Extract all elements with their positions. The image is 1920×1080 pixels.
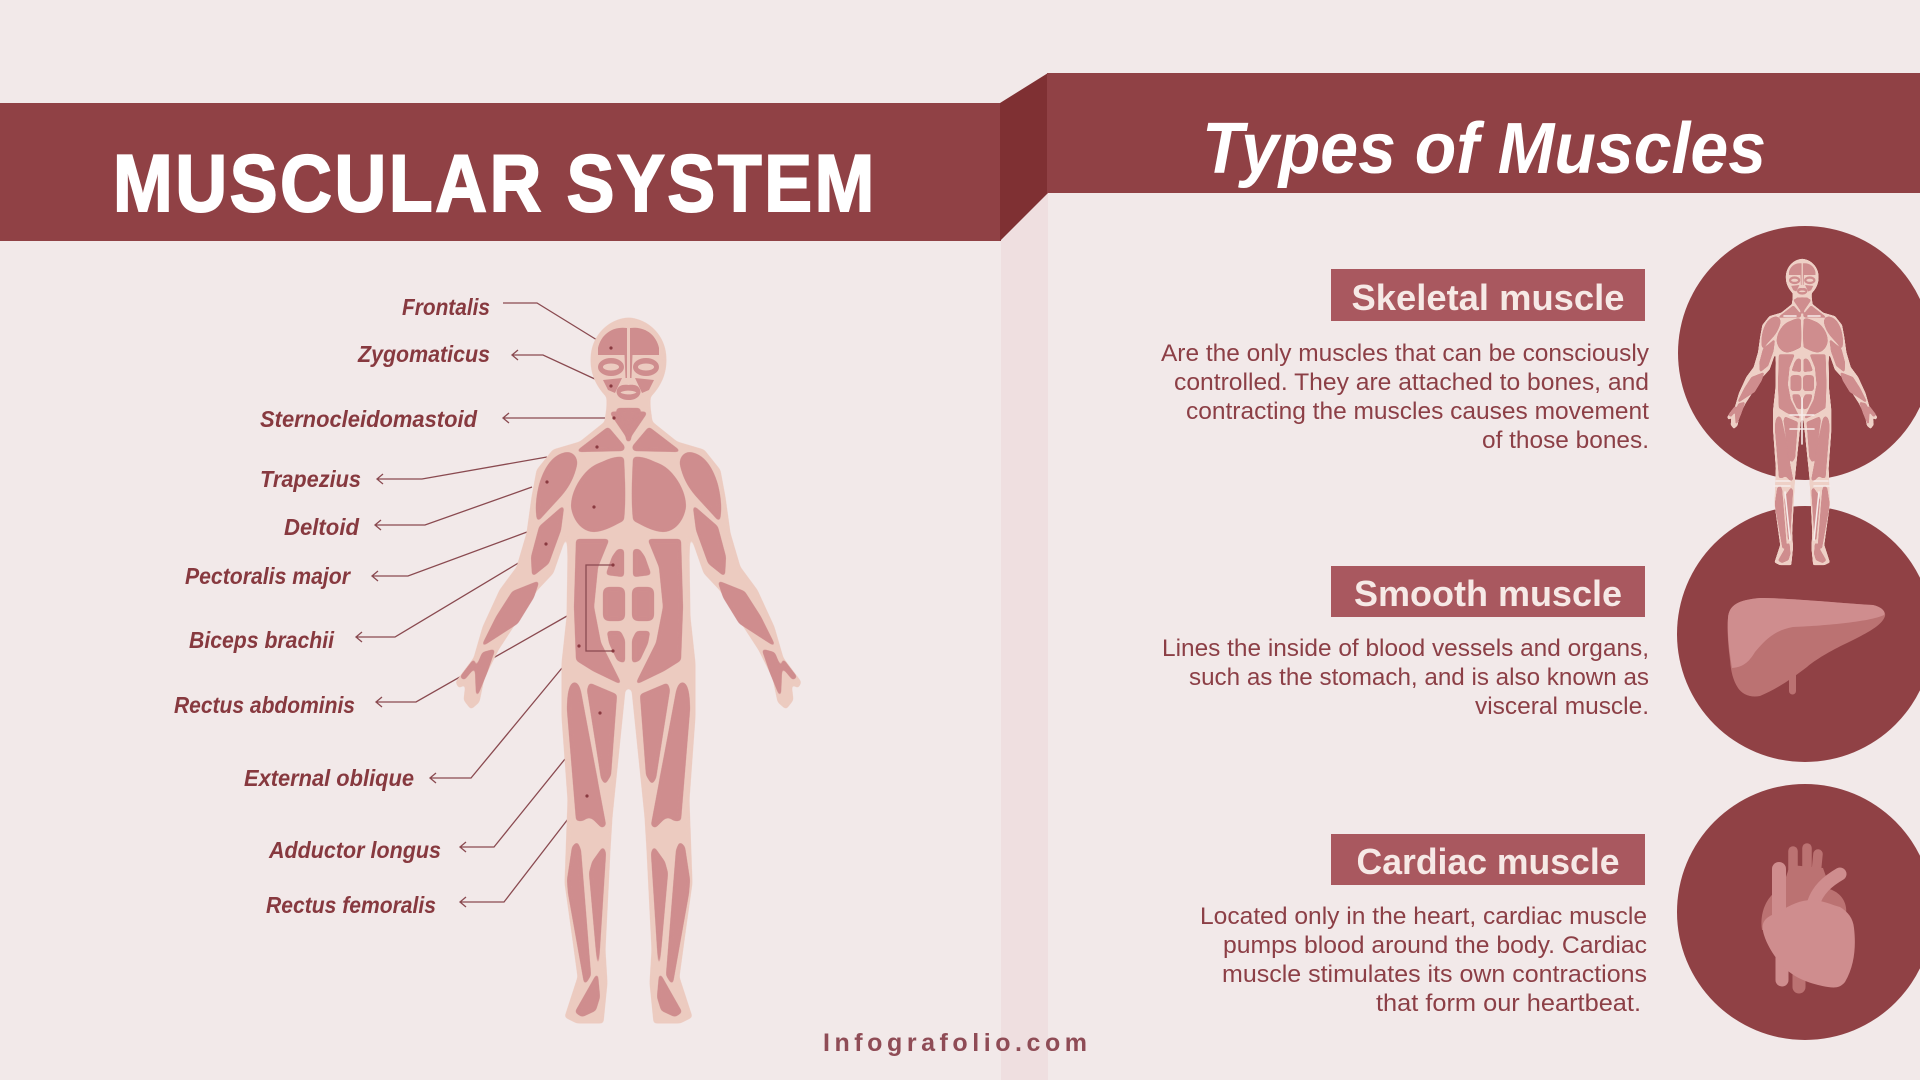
section: cardiac muscle <box>1200 834 1647 1017</box>
heading: skeletal muscle <box>1331 269 1645 321</box>
heading: smooth muscle: Smooth muscle <box>1354 573 1622 614</box>
credit: infografolio: Infografolio.com <box>823 1029 1087 1057</box>
heading: cardiac muscle <box>1331 834 1645 885</box>
text: skeletal description <box>1161 340 1649 454</box>
centre fold column <box>1001 193 1048 1080</box>
muscle labels: Biceps brachii <box>189 627 335 653</box>
muscle labels: Rectus abdominis <box>174 692 355 718</box>
muscle labels <box>174 294 490 918</box>
muscle labels: Adductor longus <box>268 837 441 863</box>
muscle labels: External oblique <box>244 765 414 791</box>
muscle labels: Pectoralis major <box>185 563 351 589</box>
icon: liver <box>1728 598 1885 697</box>
text: skeletal description: contracting the muscles causes movement <box>1186 398 1649 425</box>
heading: skeletal muscle: Skeletal muscle <box>1352 277 1624 318</box>
muscle labels: Trapezius <box>260 466 361 492</box>
text: cardiac description: pumps blood around the body. Cardiac <box>1223 932 1647 959</box>
text: smooth description: Lines the inside of blood vessels and organs, <box>1162 635 1649 662</box>
title: muscular system: MUSCULAR SYSTEM <box>113 139 877 229</box>
circle: smooth <box>1677 506 1920 762</box>
section: smooth muscle <box>1162 566 1649 720</box>
anatomy figure: large <box>456 318 801 1023</box>
muscle marker dots <box>544 346 616 798</box>
heading: cardiac muscle: Cardiac muscle <box>1356 841 1620 882</box>
icon: heart <box>1761 848 1855 987</box>
text: skeletal description: controlled. They are attached to bones, and <box>1174 369 1649 396</box>
muscle labels: Zygomaticus <box>357 341 490 367</box>
heading: smooth muscle <box>1331 566 1645 617</box>
banner fold <box>1000 73 1048 241</box>
text: cardiac description: muscle stimulates its own contractions <box>1222 961 1647 988</box>
heading: types of muscles: Types of Muscles <box>1202 109 1766 189</box>
muscle labels: Deltoid <box>284 514 360 540</box>
text: smooth description: visceral muscle. <box>1475 693 1649 720</box>
text: cardiac description: that form our heartbeat. <box>1376 990 1641 1017</box>
circle: skeletal <box>1678 226 1920 480</box>
muscle labels: Rectus femoralis <box>266 892 436 918</box>
text: skeletal description: Are the only muscles that can be consciously <box>1161 340 1649 367</box>
text: cardiac description: Located only in the heart, cardiac muscle <box>1200 903 1647 930</box>
circle: cardiac <box>1677 784 1920 1040</box>
text: cardiac description <box>1200 903 1647 1017</box>
icon: mini body <box>1727 259 1877 565</box>
text: smooth description <box>1162 635 1649 720</box>
text: smooth description: such as the stomach, and is also known as <box>1189 664 1649 691</box>
leader lines <box>356 303 605 907</box>
rectus abdominis bracket <box>586 565 613 651</box>
text: skeletal description: of those bones. <box>1482 427 1649 454</box>
muscle labels: Sternocleidomastoid <box>260 406 478 432</box>
section: skeletal muscle <box>1161 269 1649 454</box>
banner: types of muscles <box>1047 73 1920 193</box>
banner: main title <box>0 103 1001 241</box>
muscle labels: Frontalis <box>402 294 490 320</box>
